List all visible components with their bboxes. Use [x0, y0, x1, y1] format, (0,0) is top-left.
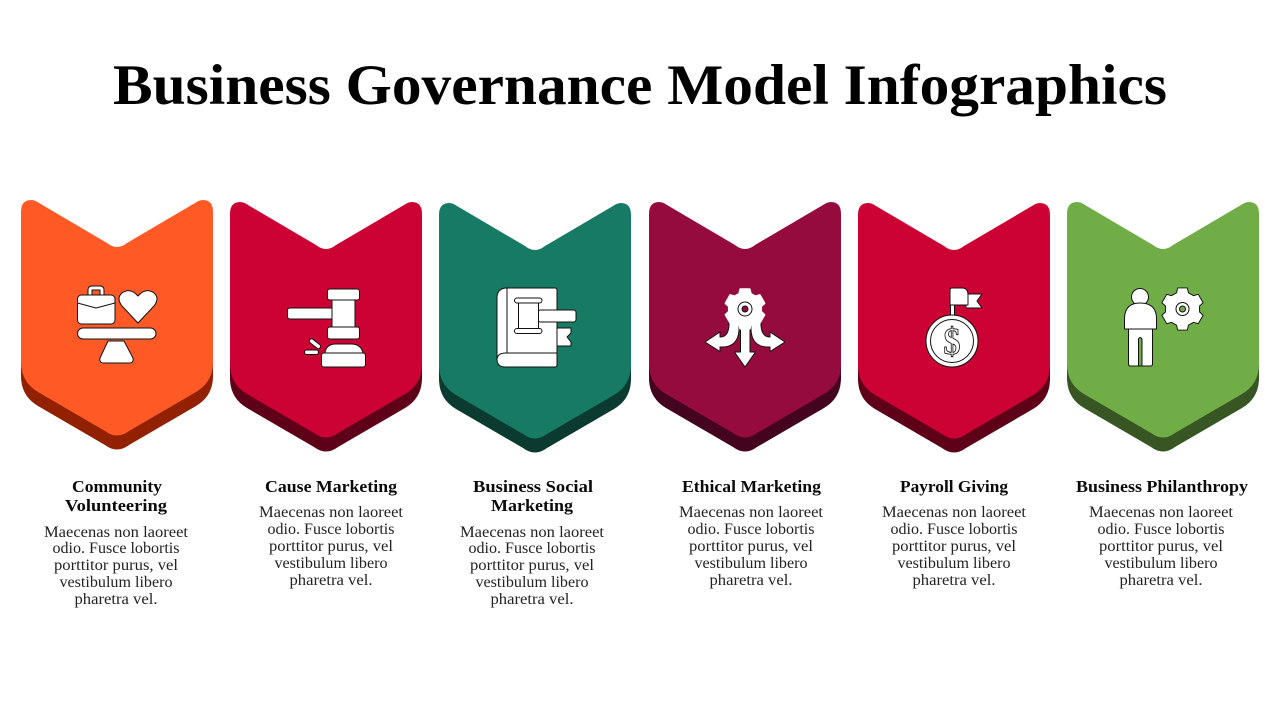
body text: vestibulum libero [476, 574, 588, 591]
title: Business Governance Model Infographics [113, 54, 1167, 117]
body text: odio. Fusce lobortis [890, 521, 1018, 538]
heading: Payroll Giving [900, 477, 1008, 496]
icon: dollar coin with flag [926, 288, 982, 367]
body text: pharetra vel. [74, 591, 158, 608]
body text [460, 524, 605, 608]
panel: Cause Marketing [230, 202, 422, 589]
heading: Business Social [473, 477, 593, 496]
body text: porttitor purus, vel [892, 538, 1017, 555]
body text [1089, 504, 1234, 589]
body text: Maecenas non laoreet [882, 504, 1027, 521]
body text: vestibulum libero [60, 574, 172, 591]
body text: vestibulum libero [1104, 555, 1218, 572]
chevron badge: orange [21, 200, 213, 450]
icon: dollar coin with flag: $ [944, 321, 960, 363]
body text: odio. Fusce lobortis [268, 521, 394, 538]
body text: Maecenas non laoreet [259, 504, 404, 521]
heading: Business Philanthropy [1076, 477, 1249, 496]
icon: person and gear [1124, 288, 1203, 366]
body text: Maecenas non laoreet [1089, 504, 1234, 521]
body text: pharetra vel. [710, 572, 792, 589]
heading: Volunteering [65, 496, 168, 515]
heading: Community [72, 477, 163, 496]
body text [679, 504, 824, 589]
body text: odio. Fusce lobortis [688, 521, 814, 538]
heading [473, 477, 593, 515]
body text: vestibulum libero [274, 555, 388, 572]
panel: Business Philanthropy [1067, 202, 1259, 589]
panel: Business Social Marketing [439, 203, 631, 608]
body text: Maecenas non laoreet [679, 504, 824, 521]
heading: Cause Marketing [265, 477, 398, 496]
body text: porttitor purus, vel [689, 538, 814, 555]
panel: Ethical Marketing [649, 202, 841, 589]
body text: porttitor purus, vel [269, 538, 394, 555]
body text [259, 504, 404, 589]
icon: book with gavel [497, 288, 576, 367]
body text: odio. Fusce lobortis [468, 540, 596, 557]
panel: Payroll Giving [858, 203, 1050, 589]
panel: Community Volunteering [21, 200, 213, 608]
icon: gavel [288, 289, 366, 367]
heading: Marketing [491, 496, 574, 515]
icon: gear with three arrows [705, 290, 785, 367]
body text [44, 524, 189, 608]
body text: porttitor purus, vel [470, 557, 595, 574]
body text: pharetra vel. [290, 572, 372, 589]
chevron badge: crimson [858, 203, 1050, 452]
body text: odio. Fusce lobortis [1098, 521, 1224, 538]
chevron badge: maroon [649, 202, 841, 452]
heading: Ethical Marketing [682, 477, 822, 496]
body text: Maecenas non laoreet [44, 524, 189, 541]
icon: briefcase and heart on balance [78, 286, 157, 363]
heading [65, 477, 168, 515]
body text: vestibulum libero [694, 555, 808, 572]
body text: odio. Fusce lobortis [52, 540, 180, 557]
body text: pharetra vel. [490, 591, 574, 608]
body text: pharetra vel. [912, 572, 996, 589]
body text: porttitor purus, vel [1099, 538, 1224, 555]
body text: pharetra vel. [1120, 572, 1202, 589]
body text: vestibulum libero [898, 555, 1010, 572]
body text: porttitor purus, vel [54, 557, 179, 574]
body text [882, 504, 1027, 589]
body text: Maecenas non laoreet [460, 524, 605, 541]
chevron badge: green [1067, 202, 1259, 452]
chevron badge: teal [439, 203, 631, 452]
chevron badge: crimson [230, 202, 422, 452]
